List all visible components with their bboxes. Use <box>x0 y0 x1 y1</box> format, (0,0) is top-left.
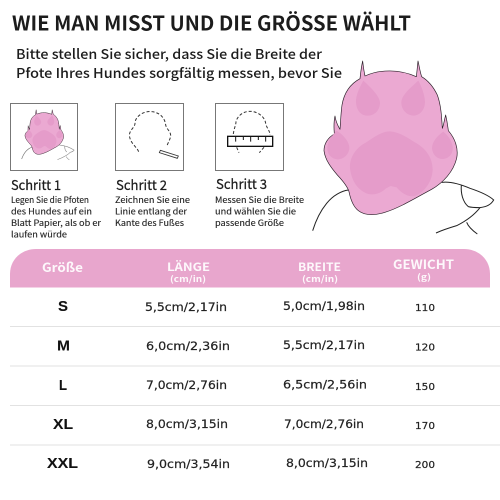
table header: (cm/in) <box>302 273 338 285</box>
table header: GEWICHT <box>393 254 454 273</box>
row L: 150 <box>415 382 435 393</box>
step 2 image box <box>116 104 184 170</box>
row XXL: 200 <box>415 460 435 471</box>
table header: (g) <box>417 271 431 283</box>
row XXL: 9,0cm/3,54in <box>147 457 230 471</box>
main pad <box>350 131 433 196</box>
intro text: Bitte stellen Sie sicher, dass Sie die Breite der <box>16 43 322 63</box>
illustration: large pink paw with hand <box>313 61 494 234</box>
title: WIE MAN MISST UND DIE GRÖSSE WÄHLT <box>12 8 411 36</box>
step 1 caption: des Hundes auf ein <box>11 206 92 218</box>
row XL: 170 <box>415 421 435 432</box>
step 1 caption: Schritt 1 <box>11 174 61 194</box>
step 1 caption <box>11 174 102 240</box>
row XL: 7,0cm/2,76in <box>284 417 364 431</box>
step 3 caption <box>215 173 304 229</box>
row S: 5,5cm/2,17in <box>145 300 227 314</box>
step 1 caption: Blatt Papier, als ob er <box>11 217 102 229</box>
row L <box>59 378 435 394</box>
step 2 caption: Schritt 2 <box>116 174 167 194</box>
step 3 caption: Messen Sie die Breite <box>215 194 304 206</box>
row XXL: XXL <box>47 456 78 472</box>
step 3 caption: und wählen Sie die <box>215 206 296 218</box>
table header: Größe <box>42 257 83 276</box>
intro text <box>16 43 342 82</box>
row L: L <box>59 378 67 394</box>
row L: 6,5cm/2,56in <box>283 378 367 392</box>
step 2 caption: Linie entlang der <box>115 206 188 218</box>
toe pad: upper right <box>401 81 425 116</box>
intro text: Pfote Ihres Hundes sorgfältig messen, bevor Sie <box>16 62 342 82</box>
row M: 5,5cm/2,17in <box>283 338 365 352</box>
row L: 7,0cm/2,76in <box>146 378 227 392</box>
step 1 caption: Legen Sie die Pfoten <box>11 194 89 206</box>
row XL <box>53 417 435 433</box>
row S <box>58 299 435 315</box>
row XL: 8,0cm/3,15in <box>146 417 228 431</box>
row XXL: 8,0cm/3,15in <box>286 456 368 470</box>
row dividers <box>10 326 500 445</box>
step 2 caption <box>115 174 190 229</box>
step 3 image box <box>216 104 284 170</box>
step 2 caption: Zeichnen Sie eine <box>115 194 190 206</box>
row XXL <box>47 456 435 472</box>
toe pad: upper left <box>356 81 380 116</box>
table header: BREITE <box>298 259 341 275</box>
table header: LÄNGE <box>167 259 210 275</box>
row M <box>57 338 435 354</box>
row S: 5,0cm/1,98in <box>283 299 365 313</box>
row M: 120 <box>415 342 435 354</box>
toe pad: left <box>327 131 349 159</box>
step 2 caption: Kante des Fußes <box>115 217 184 229</box>
table header <box>10 249 490 288</box>
step 1 image box <box>10 104 78 170</box>
row S: 110 <box>415 303 435 314</box>
step 3 caption: passende Größe <box>215 217 284 229</box>
step 1 caption: laufen würde <box>11 228 67 240</box>
row S: S <box>58 299 68 315</box>
step 3 caption: Schritt 3 <box>216 173 267 193</box>
table header: (cm/in) <box>170 273 206 285</box>
row M: M <box>57 338 70 354</box>
row XL: XL <box>53 417 73 433</box>
row M: 6,0cm/2,36in <box>146 339 230 353</box>
toe pad: right <box>432 132 453 159</box>
